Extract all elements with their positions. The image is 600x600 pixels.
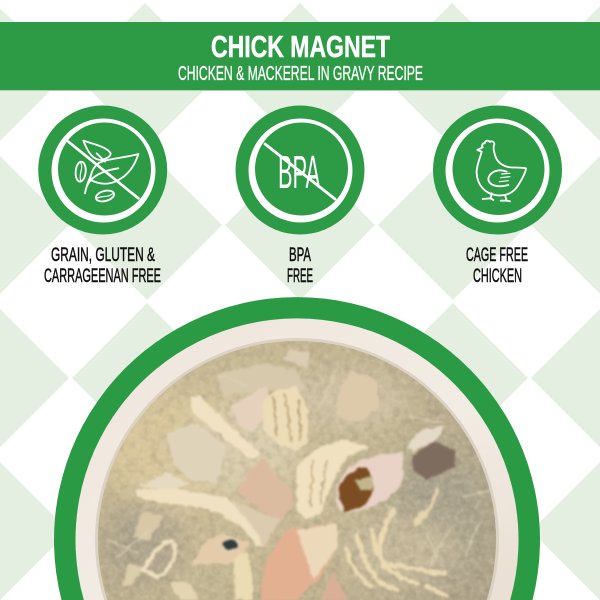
label: GRAIN, GLUTEN &: [51, 244, 155, 266]
header banner: [0, 22, 600, 91]
badge: grain, gluten and carrageenan free: CARRAGEENAN FREE: [44, 265, 161, 287]
icon: BPA crossed out: BPA: [278, 146, 320, 198]
subtitle: CHICKEN & MACKEREL IN GRAVY RECIPE: [178, 62, 423, 85]
green ring: [54, 297, 540, 600]
badge: cage free chicken: [433, 106, 562, 287]
icon: chicken: [477, 141, 526, 201]
icon: BPA crossed out: [265, 144, 335, 199]
badge: BPA free: [236, 106, 364, 287]
food: [90, 335, 510, 600]
title: CHICK MAGNET: [211, 30, 390, 64]
icon: leaves and grains crossed out: [68, 141, 138, 203]
badge: BPA free: FREE: [287, 265, 313, 287]
badge: cage free chicken: CHICKEN: [473, 265, 522, 287]
badge: grain, gluten and carrageenan free: [38, 106, 167, 287]
bowl photo in green ring: [54, 297, 540, 600]
label: CAGE FREE: [466, 244, 528, 266]
bowl rim: [76, 318, 519, 600]
label: BPA: [289, 244, 311, 266]
